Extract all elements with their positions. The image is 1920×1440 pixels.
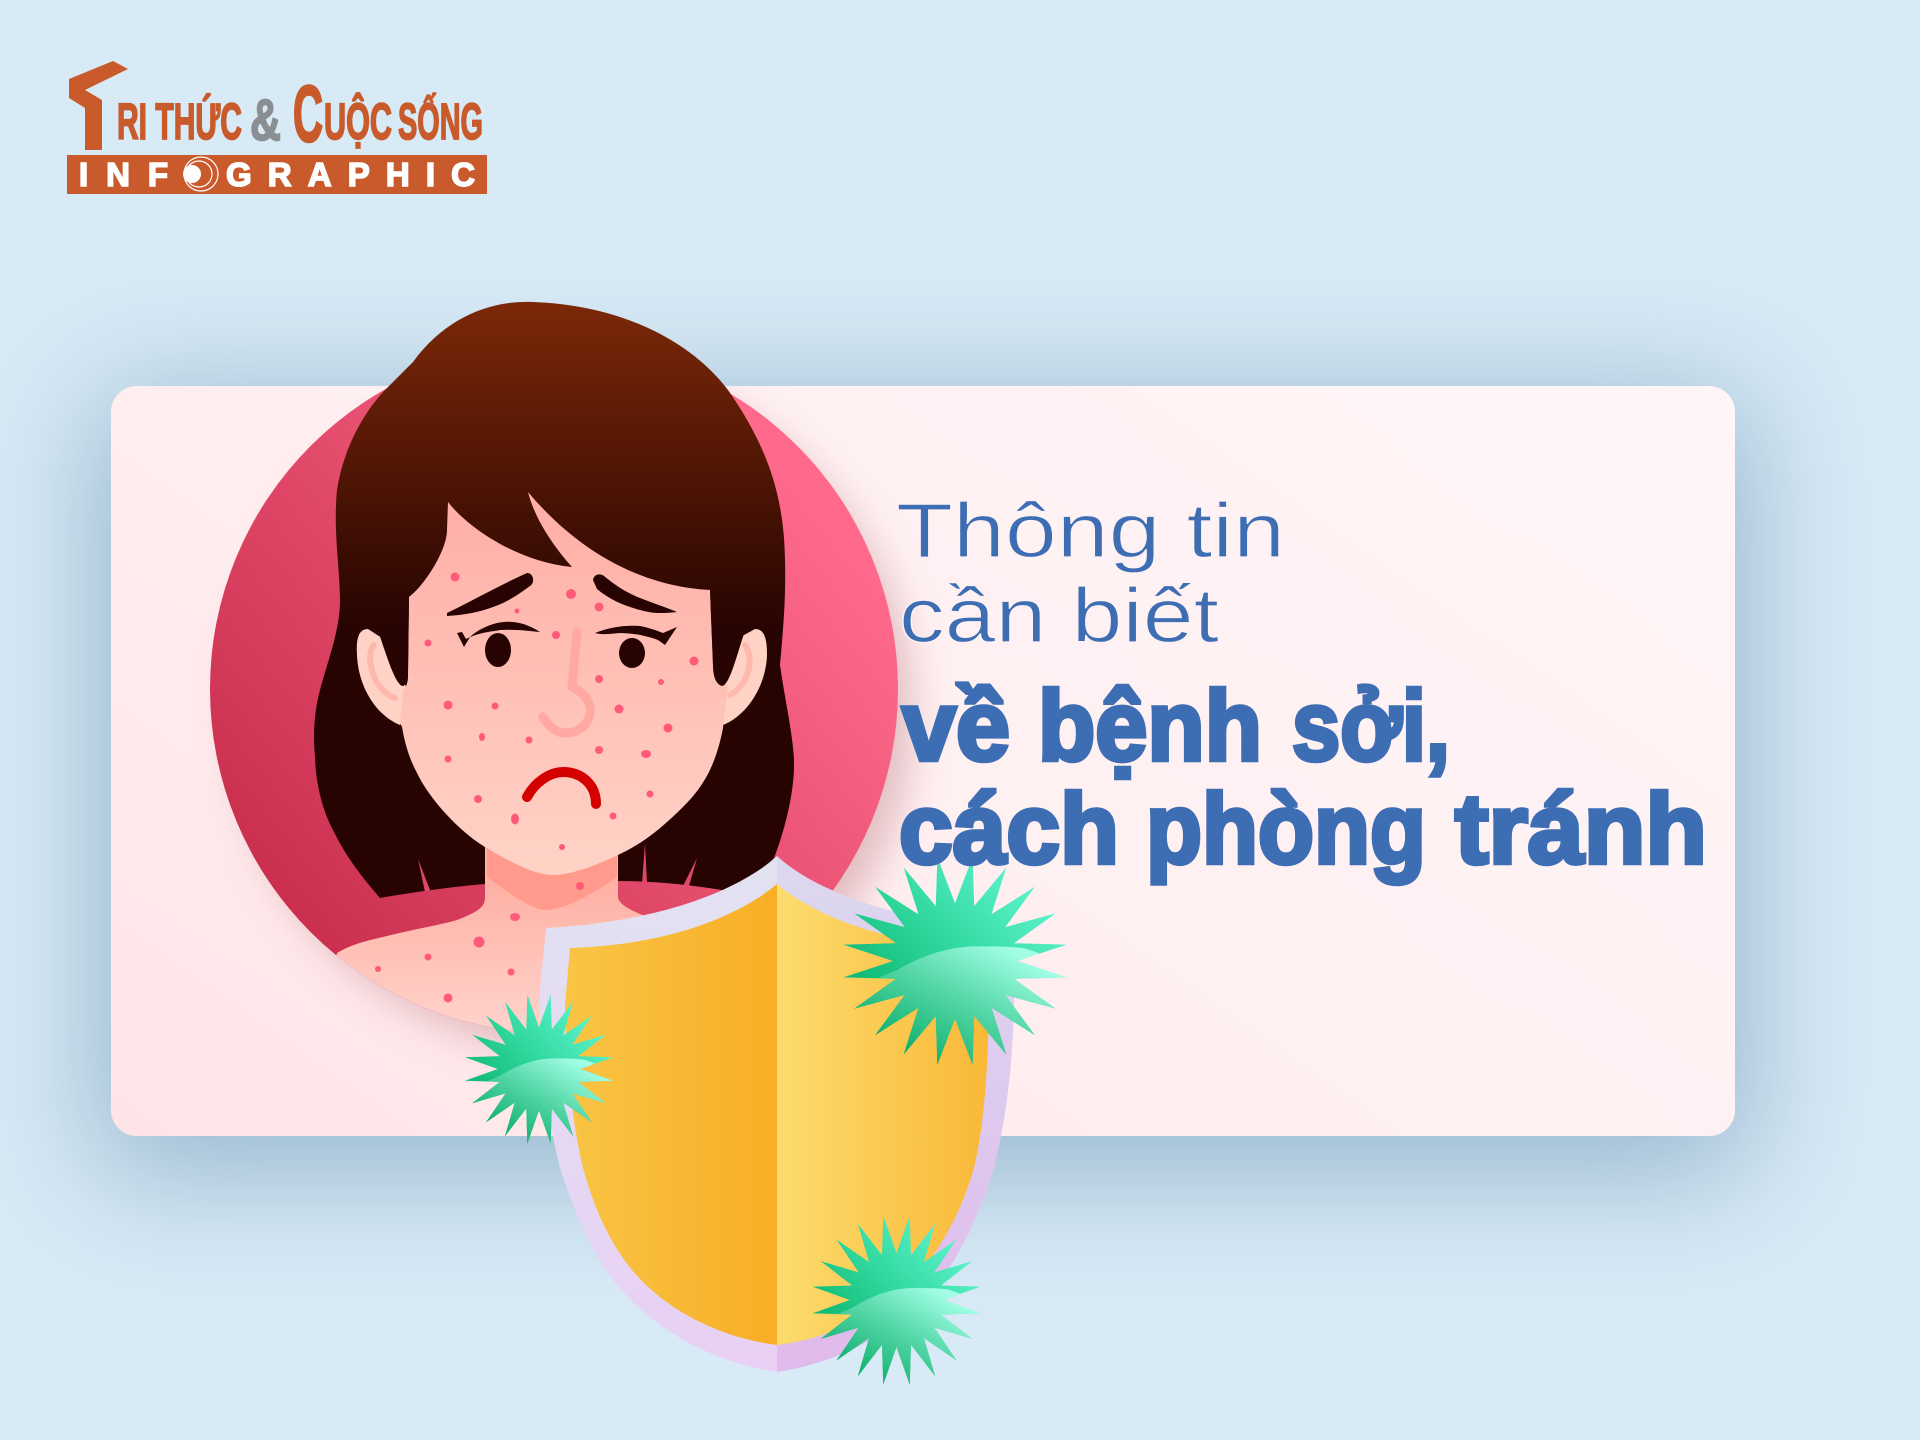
virus: bottom: [813, 1216, 980, 1384]
logo wordmark: &: [250, 88, 281, 153]
face: [400, 492, 728, 875]
headline bold line 1: bệnh: [1038, 670, 1262, 781]
measles spots: [375, 572, 698, 1002]
headline: [896, 488, 1707, 884]
banner text: [79, 156, 475, 193]
panel: title card: [111, 386, 1735, 1136]
shield rim: [540, 856, 777, 1372]
headline bold line 2: cách: [899, 773, 1119, 884]
shield: [540, 856, 1014, 1372]
illustration: woman with measles rash: [210, 302, 898, 1100]
banner text: GRAPHIC: [226, 156, 475, 193]
chest and neck: [336, 847, 644, 1030]
ears: [357, 629, 767, 725]
banner text: INF: [79, 156, 168, 193]
sideburns: [370, 590, 750, 686]
logo wordmark: [117, 69, 483, 158]
logo wordmark: SỐNG: [398, 92, 483, 150]
logo wordmark: UỘC: [324, 92, 392, 150]
headline bold line 2: phòng: [1146, 773, 1426, 884]
headline bold line 2: [899, 773, 1707, 884]
headline bold line 1: sởi,: [1292, 670, 1450, 781]
hair slivers: [418, 843, 697, 892]
headline bold line 1: về: [902, 670, 1010, 781]
nose: [543, 632, 590, 733]
logo banner: [67, 155, 487, 194]
virus: top right: [843, 857, 1067, 1065]
mouth: [527, 772, 596, 804]
headline light line 2: cần biết: [899, 573, 1219, 659]
circle shadow on card: [236, 374, 912, 1050]
headline light line 1: Thông tin: [896, 488, 1285, 574]
red circle backdrop: [210, 345, 898, 1033]
eyes: [457, 622, 677, 668]
logo icon: T mark: [69, 61, 128, 150]
eyebrows: [447, 573, 677, 616]
hair: [314, 302, 794, 898]
logo wordmark: RI THỨC: [117, 93, 242, 150]
headline bold line 1: [902, 670, 1450, 781]
logo wordmark: C: [293, 69, 323, 158]
ear details: [370, 645, 750, 698]
shield face: [565, 884, 777, 1345]
logo: Tri Thức & Cuộc Sống Infographic: [67, 61, 487, 194]
headline bold line 2: tránh: [1455, 773, 1707, 884]
virus: left: [465, 994, 613, 1144]
banner globe icon: [183, 157, 218, 191]
